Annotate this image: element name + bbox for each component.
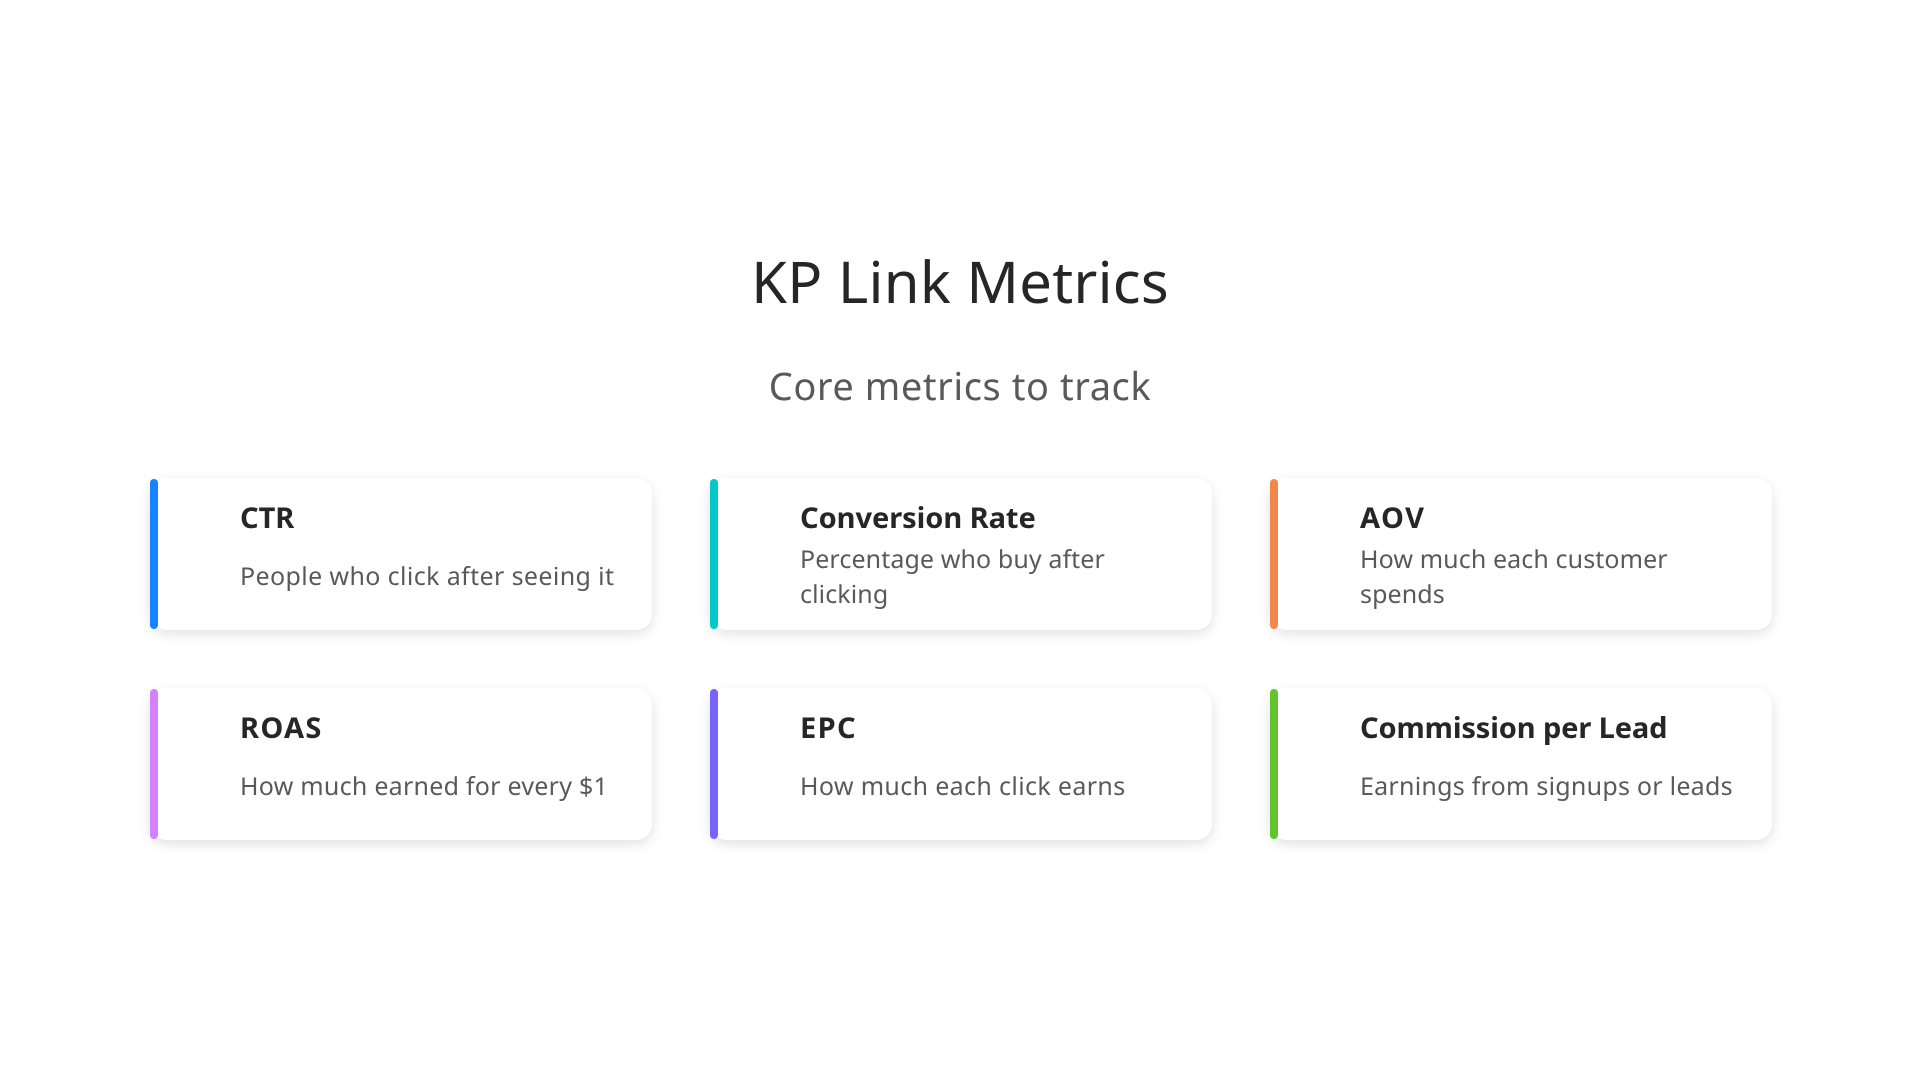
description: AOV: spends	[1360, 577, 1445, 611]
subtitle: Core metrics to track	[769, 360, 1151, 412]
title: KP Link Metrics	[751, 241, 1169, 320]
heading: Conversion Rate: Conversion Rate	[800, 498, 1036, 537]
panel: Commission per Lead	[1270, 688, 1772, 840]
description: EPC: How much each click earns	[800, 769, 1126, 803]
description: ROAS: How much earned for every $1	[240, 769, 608, 803]
panel: EPC	[710, 688, 1212, 840]
panel: CTR	[150, 478, 652, 630]
description: Conversion Rate: clicking	[800, 577, 888, 611]
heading: AOV: AOV	[1360, 498, 1426, 537]
panel: Conversion Rate	[710, 478, 1212, 630]
panel: AOV	[1270, 478, 1772, 630]
accent bar: Conversion Rate	[710, 479, 718, 629]
accent bar: CTR	[150, 479, 158, 629]
heading: EPC: EPC	[800, 708, 857, 747]
description: AOV	[1360, 542, 1668, 611]
heading: CTR: CTR	[240, 498, 294, 537]
description: Conversion Rate	[800, 542, 1105, 611]
heading: Commission per Lead: Commission per Lead	[1360, 708, 1667, 747]
accent bar: AOV	[1270, 479, 1278, 629]
description: CTR: People who click after seeing it	[240, 559, 614, 593]
accent bar: ROAS	[150, 689, 158, 839]
accent bar: Commission per Lead	[1270, 689, 1278, 839]
heading: ROAS: ROAS	[240, 708, 323, 747]
description: AOV: How much each customer	[1360, 542, 1668, 576]
panel: ROAS	[150, 688, 652, 840]
description: Conversion Rate: Percentage who buy after	[800, 542, 1105, 576]
description: Commission per Lead: Earnings from signups or leads	[1360, 769, 1733, 803]
accent bar: EPC	[710, 689, 718, 839]
